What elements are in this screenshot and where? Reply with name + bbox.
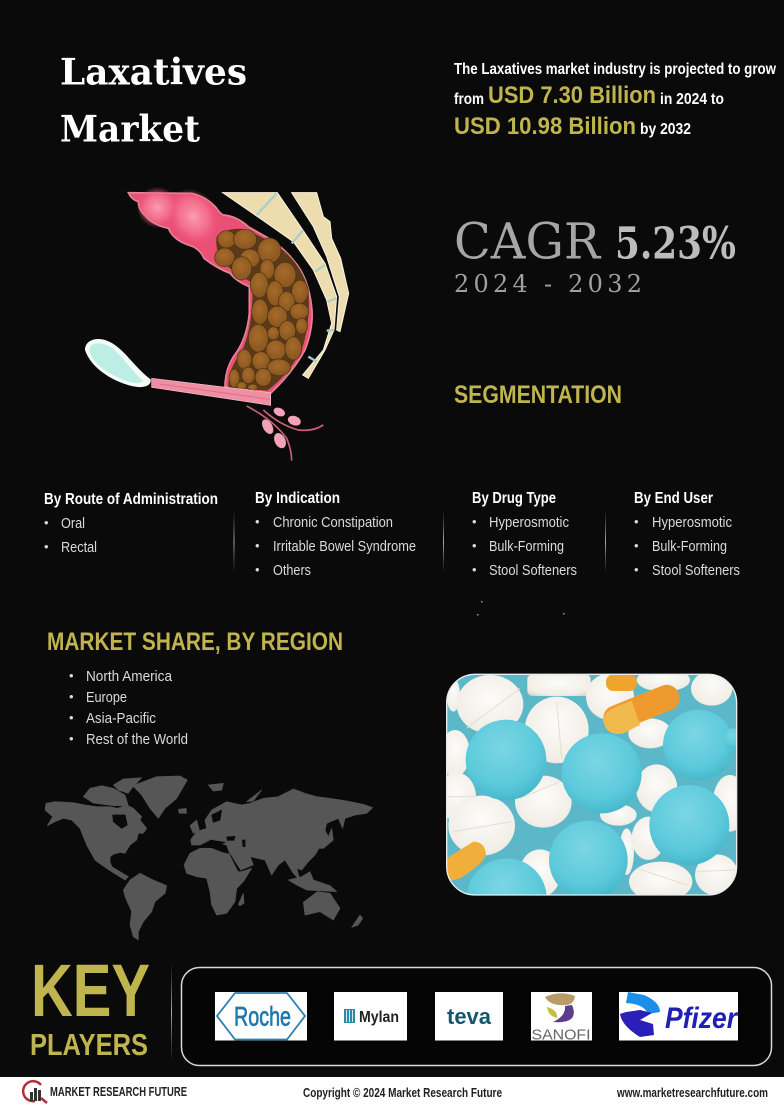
- bulb: [85, 339, 151, 387]
- column: by indication: By Indication: [255, 490, 340, 507]
- capsules: [447, 674, 683, 882]
- logo: Sanofi: [531, 992, 592, 1044]
- footer: Copyright © 2024 Market Research Future: [303, 1086, 502, 1100]
- column: by drug type: [472, 490, 577, 579]
- CAGR: 5.23%: [615, 218, 736, 270]
- column: by route of administration: Oral: [61, 516, 85, 532]
- footer: [0, 1077, 784, 1108]
- column: by indication: [255, 490, 416, 579]
- bones: coccyx: [292, 193, 349, 332]
- market projection text: by 2032: [640, 121, 691, 138]
- logo: teva: [435, 992, 503, 1040]
- column: by indication: •: [255, 538, 260, 553]
- region list: •: [69, 689, 74, 704]
- column: by indication: Others: [273, 563, 311, 579]
- column: by drug type: •: [472, 514, 477, 529]
- CAGR: CAGR: [454, 212, 601, 270]
- column: by end user: Stool Softeners: [652, 563, 740, 579]
- logo: Roche: Roche: [234, 1002, 291, 1032]
- world map: [45, 776, 373, 940]
- illustration: colon with stool: [85, 179, 349, 461]
- column: by route of administration: •: [44, 539, 49, 554]
- market projection text: USD 7.30 Billion: [488, 82, 656, 109]
- column: by drug type: By Drug Type: [472, 490, 556, 507]
- column: by indication: •: [255, 514, 260, 529]
- key players heading: PLAYERS: [30, 1027, 148, 1062]
- logo: Pfizer: Pfizer: [665, 1002, 739, 1035]
- column: by end user: •: [634, 538, 639, 553]
- tablet score lines: [448, 688, 735, 885]
- logo: Pfizer: [619, 992, 739, 1040]
- column: by end user: By End User: [634, 490, 713, 507]
- bone joints: [257, 193, 337, 362]
- column: by route of administration: Rectal: [61, 540, 97, 556]
- column: by end user: •: [634, 514, 639, 529]
- column: by indication: •: [255, 562, 260, 577]
- stool mass: [215, 229, 309, 391]
- logo: Mylan: Mylan: [359, 1009, 399, 1026]
- footer logo: [23, 1081, 47, 1103]
- colon pink outer: [128, 193, 312, 393]
- key players heading: KEY: [31, 949, 150, 1032]
- column: by drug type: Bulk-Forming: [489, 539, 564, 555]
- blue tablets: [466, 710, 736, 894]
- market projection text: from: [454, 91, 484, 108]
- logo: Roche: [215, 992, 307, 1040]
- column: by drug type: Stool Softeners: [489, 563, 577, 579]
- title: [60, 52, 247, 150]
- column: by drug type: Hyperosmotic: [489, 515, 569, 531]
- key players box: [182, 968, 772, 1066]
- column: by route of administration: [44, 491, 218, 556]
- bulb inner: [89, 343, 143, 383]
- CAGR: 2024 - 2032: [454, 270, 642, 298]
- column: by end user: Bulk-Forming: [652, 539, 727, 555]
- column: by end user: •: [634, 562, 639, 577]
- region list: Asia-Pacific: [86, 711, 156, 727]
- column: by end user: [634, 490, 740, 579]
- column: by end user: Hyperosmotic: [652, 515, 732, 531]
- heading: segmentation: SEGMENTATION: [454, 381, 622, 409]
- white tablets: [447, 675, 736, 894]
- logo: Sanofi: SANOFI: [532, 1026, 590, 1044]
- heading: market share by region: MARKET SHARE, BY REGION: [47, 628, 343, 656]
- column: by drug type: •: [472, 538, 477, 553]
- nerve branches and glands: [247, 406, 323, 461]
- CAGR: [454, 212, 736, 298]
- footer: MARKET RESEARCH FUTURE: [50, 1085, 187, 1099]
- logo: teva: teva: [447, 1004, 492, 1029]
- market projection text: [454, 61, 777, 140]
- title: Market: [60, 108, 200, 150]
- photo: pills: [446, 674, 738, 896]
- region list: •: [69, 668, 74, 683]
- region list: [69, 668, 188, 748]
- region list: Europe: [86, 690, 127, 706]
- column: by indication: Chronic Constipation: [273, 515, 393, 531]
- logo: Mylan: [334, 992, 407, 1040]
- colon highlights: [137, 179, 229, 254]
- canal: [152, 378, 271, 405]
- title: Laxatives: [60, 52, 247, 94]
- column: by route of administration: By Route of Administration: [44, 491, 218, 508]
- column: by route of administration: •: [44, 515, 49, 530]
- bones: sacrum: [223, 193, 337, 378]
- region list: •: [69, 731, 74, 746]
- column: by indication: Irritable Bowel Syndrome: [273, 539, 416, 555]
- key players heading: [30, 949, 150, 1062]
- region list: North America: [86, 669, 173, 685]
- market projection text: in 2024 to: [660, 91, 724, 108]
- column: by drug type: •: [472, 562, 477, 577]
- market projection text: USD 10.98 Billion: [454, 113, 636, 140]
- region list: •: [69, 710, 74, 725]
- region list: Rest of the World: [86, 732, 188, 748]
